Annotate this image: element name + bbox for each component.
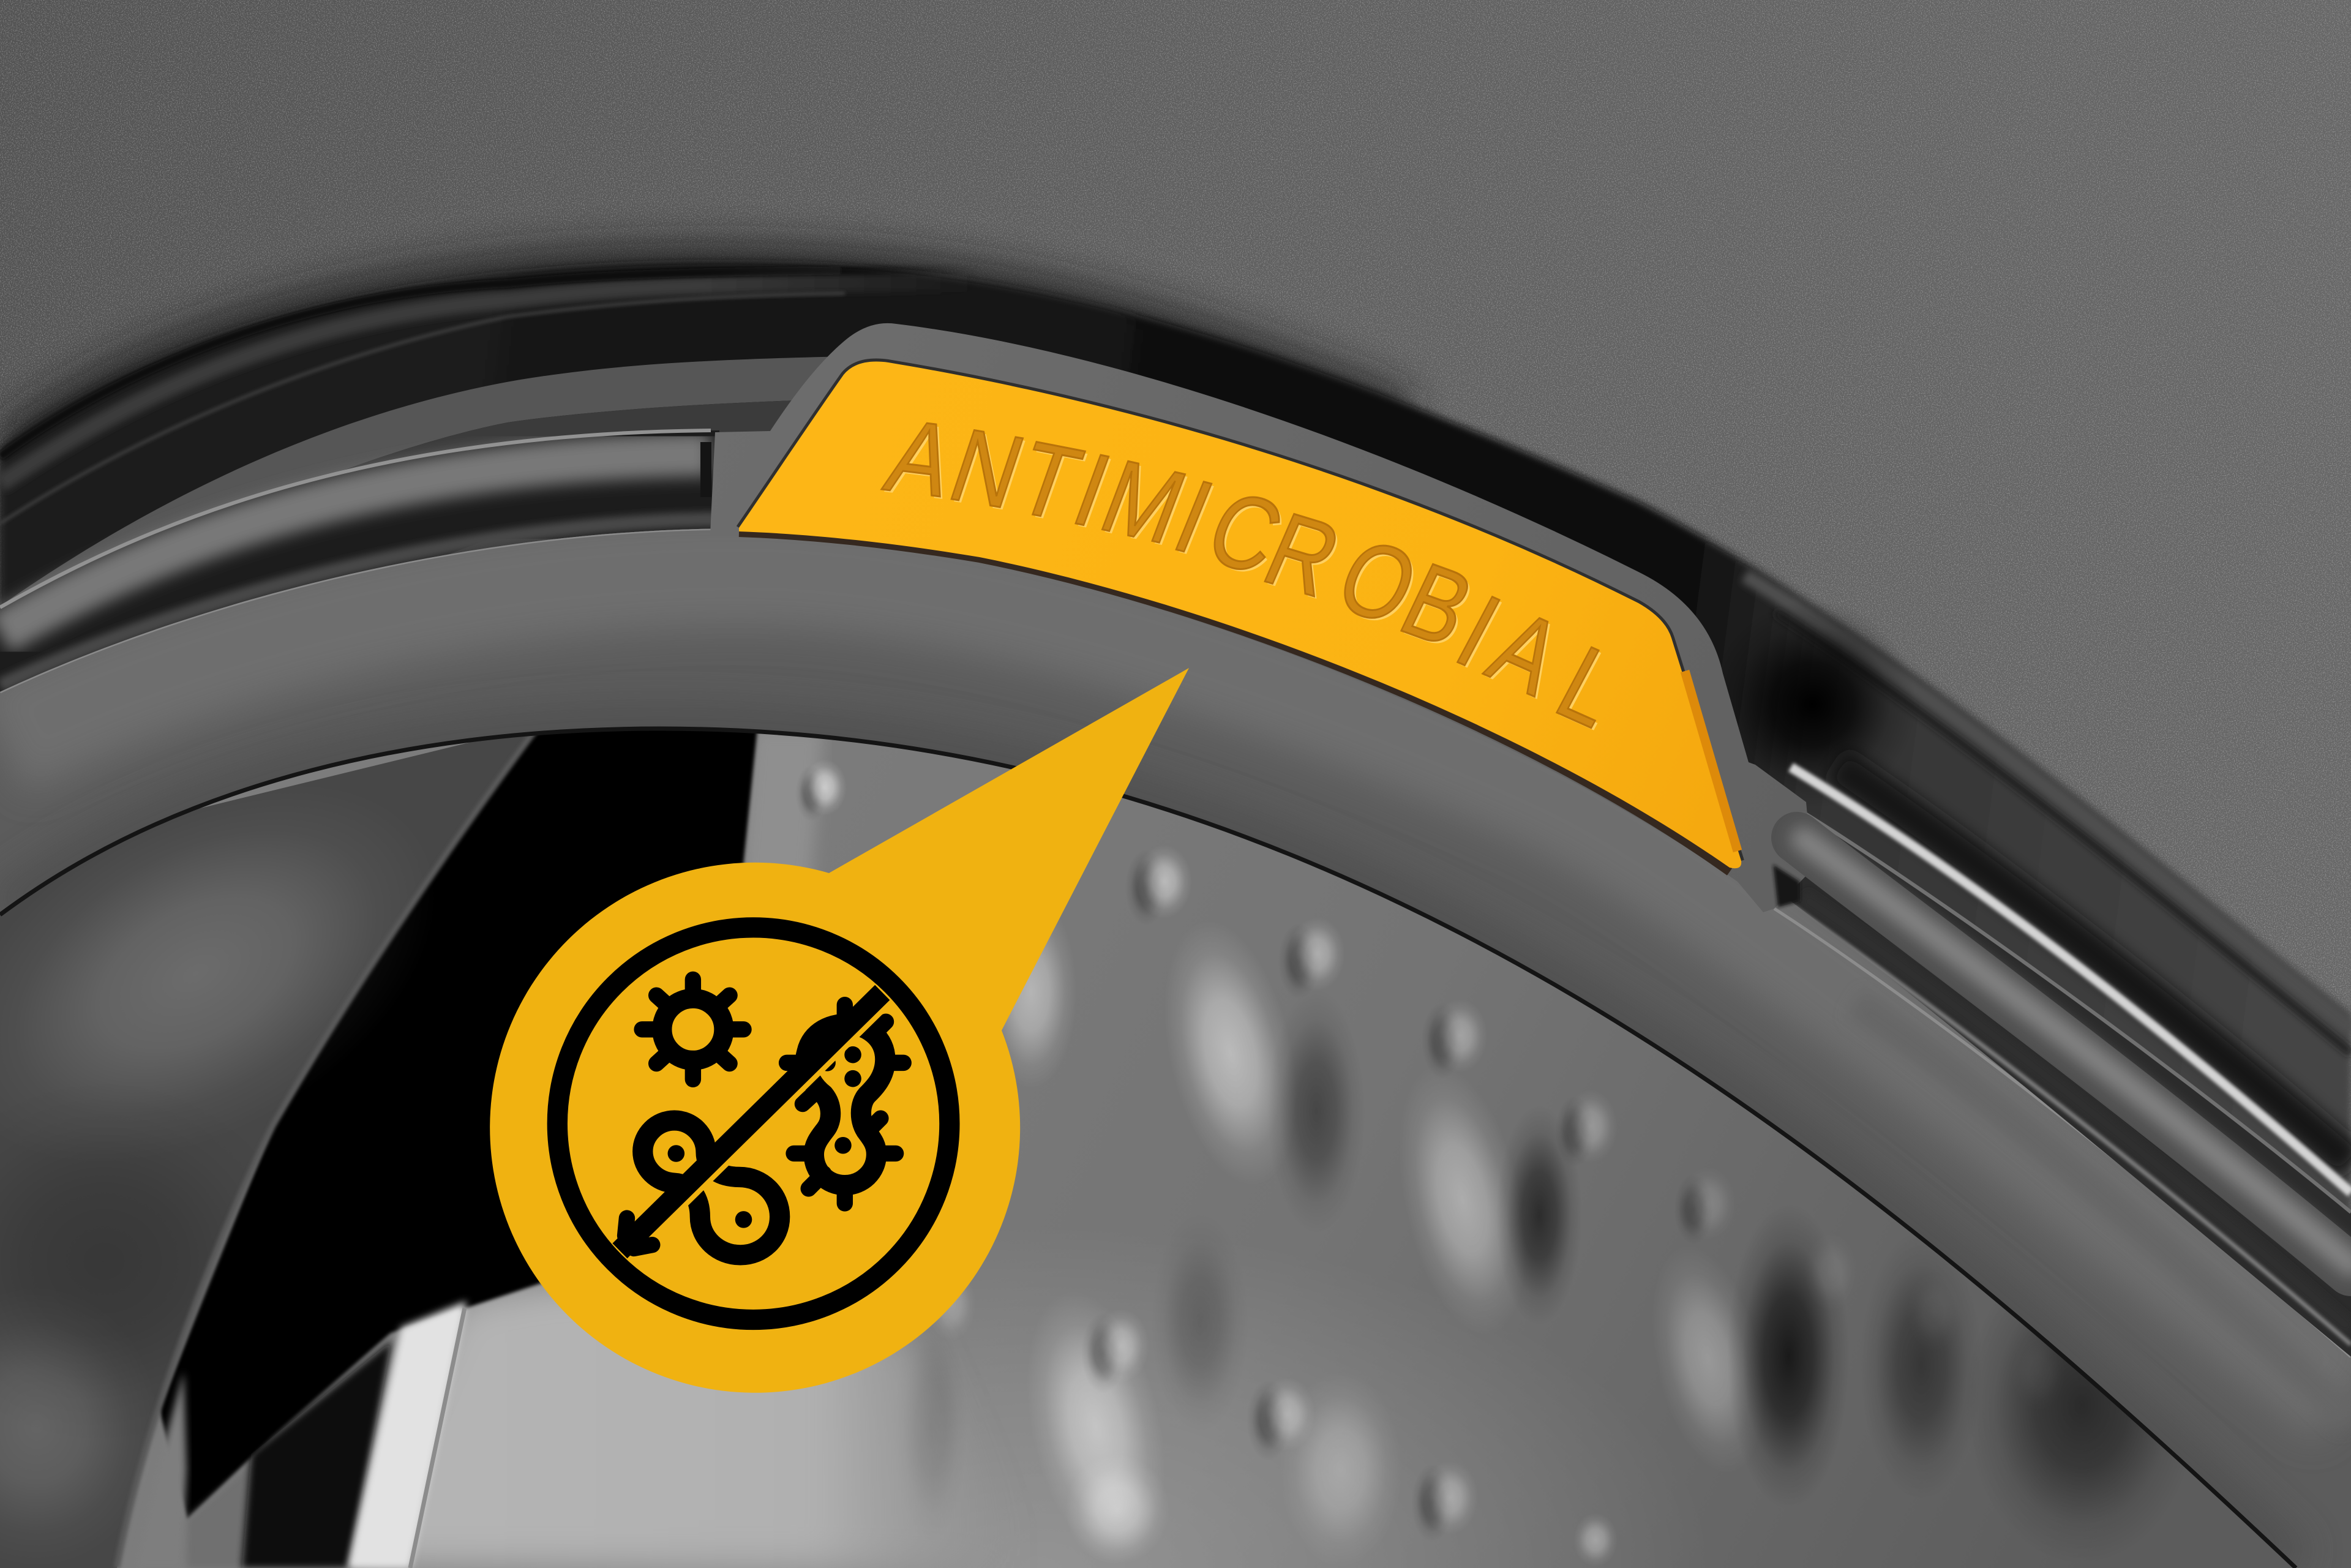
yellow tab body xyxy=(739,362,1741,868)
drum interior xyxy=(0,731,2279,1568)
lighter vertical stripe xyxy=(738,729,823,918)
callout bubble xyxy=(490,668,1189,1393)
tab frame xyxy=(710,323,1812,912)
grey ring face xyxy=(0,529,2351,1568)
drum dimple highlights xyxy=(803,759,2066,1567)
slash spikes xyxy=(625,1218,652,1248)
gasket bands upper left xyxy=(0,269,980,673)
antimicrobial tab xyxy=(739,362,1741,872)
gap shadow below tab xyxy=(739,533,1730,872)
icon: bacterium xyxy=(787,1005,904,1203)
drum surface xyxy=(117,733,2279,1568)
slash knockout gap xyxy=(629,1002,891,1260)
prohibition ring xyxy=(557,928,950,1319)
ridge cylinder right xyxy=(1797,838,2351,1270)
gap shadow above tab xyxy=(739,362,1741,861)
drum shadows xyxy=(894,989,2198,1564)
icon: dividing cell xyxy=(643,1120,780,1255)
light wash at lower left of the drum xyxy=(343,1280,1029,1568)
icon: no microbes xyxy=(557,928,950,1319)
side gasket soft light xyxy=(0,704,503,1567)
embossed label highlight: ANTIMICROBIAL xyxy=(830,400,1691,752)
prohibition slash xyxy=(620,992,882,1251)
embossed label: ANTIMICROBIAL xyxy=(827,398,1689,749)
side gasket left xyxy=(0,726,539,1568)
bubble body and pointer xyxy=(490,668,1189,1393)
black interior void xyxy=(159,722,758,1519)
drum dimple shadows xyxy=(795,765,1713,1542)
orange side edge xyxy=(1685,671,1738,851)
drum edge line xyxy=(0,729,2296,1568)
icon: virus cell xyxy=(642,980,744,1079)
side gasket soft shade xyxy=(0,1078,306,1445)
silver trim and groove right xyxy=(1763,767,2351,1371)
gasket edge line xyxy=(117,726,539,1568)
groove notch xyxy=(1773,865,1800,907)
soft light on lower drum xyxy=(367,1225,1714,1568)
drum highlights xyxy=(985,894,1783,1568)
lower left trim pieces xyxy=(136,1301,467,1568)
ring ridge left xyxy=(0,430,722,722)
